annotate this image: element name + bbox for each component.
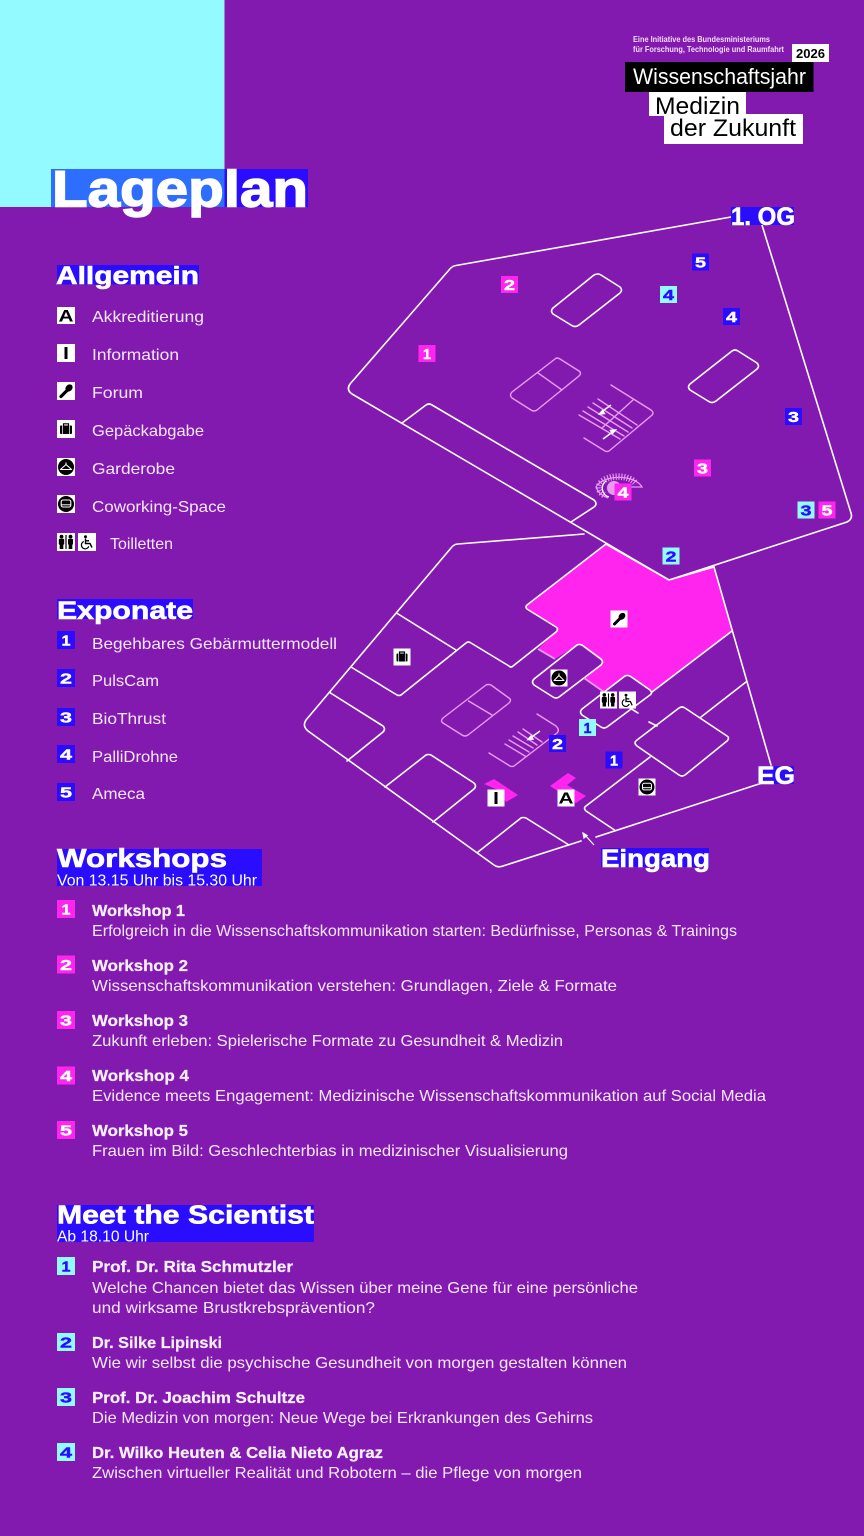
scientist 4	[57, 1443, 582, 1482]
marker: pink 5	[818, 502, 836, 520]
marker 4: 4	[60, 746, 73, 764]
pink marker shape: I	[484, 779, 518, 802]
logo: Wissenschaftsjahr 2026: Eine Initiative des Bundesministeriums	[633, 34, 770, 44]
floor plan: 1. OG	[348, 203, 852, 580]
icon: luggage	[394, 648, 410, 666]
label: 1. OG: 1. OG	[731, 203, 795, 231]
workshop 4	[57, 1066, 766, 1105]
marker: cyan 4	[660, 286, 677, 304]
workshop 3: Workshop 3	[92, 1013, 188, 1030]
pink forum area	[526, 544, 732, 692]
label: Toilletten: Toilletten	[110, 536, 173, 553]
marker: pink 1	[418, 345, 436, 363]
marker: dark 1: 1	[610, 752, 618, 770]
marker: pink 4	[614, 484, 632, 502]
walls: right rooms	[584, 682, 746, 830]
icon: I	[488, 790, 504, 806]
label: Begehbares Gebärmuttermodell: Begehbares Gebärmuttermodell	[92, 636, 337, 653]
icon: A Akkreditierung	[57, 307, 75, 326]
icon: microphone	[610, 610, 628, 628]
panel: Exponate legend	[57, 597, 337, 803]
label: EG: EG	[757, 762, 795, 790]
label: Forum: Forum	[92, 385, 143, 402]
label: Ameca: Ameca	[92, 786, 145, 803]
wall: right	[714, 567, 771, 765]
marker 4	[57, 745, 75, 764]
marker: pink 1: 1	[423, 346, 431, 363]
label: BioThrust: BioThrust	[92, 711, 167, 728]
marker: dark 5	[692, 254, 709, 272]
label: Coworking-Space: Coworking-Space	[92, 499, 226, 516]
outline: ground floor	[304, 534, 584, 867]
marker: dark 5: 5	[695, 254, 706, 272]
heading: Meet the Scientist: Ab 18.10 Uhr	[57, 1228, 150, 1246]
scientist 4: 4	[60, 1444, 73, 1462]
marker: dark 2	[549, 735, 566, 753]
marker: cyan 1	[579, 719, 596, 737]
arrow: stairs EG	[528, 731, 540, 740]
marker: pink 3	[694, 460, 711, 478]
room: bottom	[478, 818, 569, 852]
marker: cyan 4: 4	[663, 287, 675, 304]
scientist 1	[57, 1257, 638, 1317]
title: Lageplan: Lageplan	[52, 160, 308, 218]
panel: Allgemein legend	[56, 262, 226, 553]
stairs EG	[489, 714, 558, 766]
label: PulsCam: PulsCam	[92, 673, 159, 690]
scientist 1: Welche Chancen bietet das Wissen über meine Gene für eine persönliche	[92, 1280, 638, 1297]
scientist 1: Prof. Dr. Rita Schmutzler	[92, 1259, 293, 1276]
scientist 3: Die Medizin von morgen: Neue Wege bei Erkrankungen des Gehirns	[92, 1410, 593, 1427]
icon: coworking	[57, 495, 75, 513]
icon: A	[558, 790, 574, 808]
pink marker shape: A	[550, 773, 586, 803]
room: garderobe	[532, 644, 602, 698]
workshop 3: 3	[60, 1012, 72, 1030]
marker 3	[57, 708, 75, 726]
workshop 2	[57, 956, 617, 995]
marker: cyan 2: 2	[666, 548, 676, 566]
heading: Allgemein: Allgemein	[56, 262, 199, 290]
icon: toilets	[600, 692, 617, 708]
scientist 3: 3	[60, 1390, 72, 1406]
cyan corner block	[0, 0, 224, 207]
elevator	[510, 358, 580, 411]
marker 1	[57, 631, 75, 650]
scientist 2: 2	[60, 1334, 72, 1352]
marker 5	[57, 783, 75, 802]
heading: Meet the Scientist: Meet the Scientist	[57, 1200, 314, 1230]
workshop 2: 2	[60, 957, 72, 974]
arrow: entrance	[583, 833, 594, 845]
scientist 2	[57, 1333, 627, 1372]
marker 5: 5	[60, 784, 72, 802]
marker: pink 5: 5	[822, 502, 832, 520]
scientist 4: Dr. Wilko Heuten & Celia Nieto Agraz	[92, 1445, 383, 1462]
workshop 4: Workshop 4	[92, 1068, 189, 1085]
outline: entrance to EG	[596, 783, 762, 837]
marker 3: 3	[60, 710, 72, 726]
workshop 1: 1	[62, 902, 70, 918]
icon: wheelchair	[78, 533, 96, 551]
workshop 4: Evidence meets Engagement: Medizinische Wissenschaftskommunikation auf Social Media	[92, 1088, 766, 1105]
scientist 4: Zwischen virtueller Realität und Robotern – die Pflege von morgen	[92, 1465, 582, 1482]
icon: hanger	[550, 670, 568, 686]
marker: cyan 2	[662, 548, 680, 566]
workshop 5: 5	[60, 1122, 72, 1140]
logo: Wissenschaftsjahr 2026: Wissenschaftsjahr	[633, 64, 806, 89]
spiral stairs	[596, 477, 642, 498]
workshop 5	[57, 1121, 568, 1160]
panel: Workshops	[57, 843, 766, 1160]
scientist 3	[57, 1388, 593, 1427]
scientist 3: Prof. Dr. Joachim Schultze	[92, 1390, 305, 1407]
scientist 1: 1	[62, 1258, 70, 1276]
icon: A: A	[558, 790, 574, 808]
icon: hanger	[57, 458, 75, 476]
outline: upper floor	[348, 217, 852, 580]
marker: dark 1	[606, 752, 622, 770]
label: Information: Information	[92, 347, 179, 364]
logo: Wissenschaftsjahr 2026	[625, 34, 829, 144]
icon: Forum microphone	[57, 382, 75, 400]
room: large block	[635, 707, 728, 776]
logo: Wissenschaftsjahr 2026: Medizin	[655, 93, 740, 120]
heading: Workshops: Von 13.15 Uhr bis 15.30 Uhr	[57, 872, 258, 890]
label: Garderobe: Garderobe	[92, 461, 175, 478]
marker 2: 2	[60, 670, 72, 688]
scientist 2: Dr. Silke Lipinski	[92, 1335, 222, 1352]
dashes: pale door lines	[538, 649, 604, 692]
stairs	[579, 385, 653, 452]
icon: A Akkreditierung: A	[58, 308, 74, 326]
marker: cyan 3: 3	[800, 502, 812, 520]
logo: Wissenschaftsjahr 2026: der Zukunft	[670, 115, 796, 142]
workshop 2: Workshop 2	[92, 958, 188, 975]
workshop 4: 4	[60, 1068, 73, 1085]
label: Gepäckabgabe: Gepäckabgabe	[92, 423, 204, 440]
room: right block	[688, 350, 758, 402]
marker: dark 4: 4	[726, 309, 738, 326]
workshop 5: Workshop 5	[92, 1123, 188, 1140]
room: left	[330, 693, 384, 761]
marker: pink 2: 2	[504, 277, 515, 294]
workshop 1	[57, 900, 737, 940]
scientist 2: Wie wir selbst die psychische Gesundheit von morgen gestalten können	[92, 1355, 627, 1372]
marker: pink 3: 3	[697, 460, 708, 478]
tick: doors	[630, 708, 657, 726]
logo: Wissenschaftsjahr 2026: für Forschung, Technologie und Raumfahrt	[633, 44, 784, 54]
marker: cyan 1: 1	[584, 720, 592, 737]
marker: dark 4	[723, 308, 740, 326]
floor plan: EG	[304, 534, 795, 873]
label: Akkreditierung: Akkreditierung	[92, 309, 204, 326]
marker: pink 4: 4	[618, 484, 629, 502]
room: long room	[402, 404, 596, 522]
heading: Workshops: Workshops	[57, 843, 227, 873]
room: upper block	[552, 274, 622, 326]
room: bottom left	[385, 754, 476, 822]
marker: pink 2	[501, 276, 518, 294]
marker: dark 3: 3	[788, 409, 799, 426]
workshop 5: Frauen im Bild: Geschlechterbias in medizinischer Visualisierung	[92, 1143, 568, 1160]
marker 2	[57, 669, 75, 688]
icon: coworking	[638, 778, 656, 796]
marker: dark 2: 2	[552, 736, 563, 753]
workshop 2: Wissenschaftskommunikation verstehen: Grundlagen, Ziele & Formate	[92, 978, 617, 995]
workshop 1: Erfolgreich in die Wissenschaftskommunikation starten: Bedürfnisse, Personas & Trainings	[92, 923, 737, 940]
heading: Workshops	[57, 843, 262, 890]
arrows: stairs	[600, 405, 616, 439]
marker: cyan 3	[798, 502, 814, 520]
marker 1: 1	[62, 632, 70, 650]
icon: toilets	[57, 533, 75, 551]
elevator EG	[442, 684, 510, 736]
icon: I Information	[57, 344, 75, 362]
workshop 3: Zukunft erleben: Spielerische Formate zu Gesundheit & Medizin	[92, 1033, 563, 1050]
label: Eingang: Eingang	[601, 845, 710, 873]
label: PalliDrohne: PalliDrohne	[92, 749, 178, 766]
icon: luggage	[57, 420, 75, 438]
workshop 1: Workshop 1	[92, 903, 185, 920]
marker: dark 3	[785, 408, 802, 426]
room: toilets	[580, 676, 652, 728]
icon: wheelchair	[619, 692, 636, 708]
logo: Wissenschaftsjahr 2026: 2026	[796, 46, 825, 61]
heading: Exponate: Exponate	[57, 597, 193, 625]
walls: forum border	[351, 544, 732, 696]
panel: Meet the Scientist	[57, 1200, 638, 1482]
scientist 1: und wirksame Brustkrebsprävention?	[92, 1300, 375, 1317]
heading: Meet the Scientist	[57, 1200, 314, 1246]
workshop 3	[57, 1011, 563, 1050]
